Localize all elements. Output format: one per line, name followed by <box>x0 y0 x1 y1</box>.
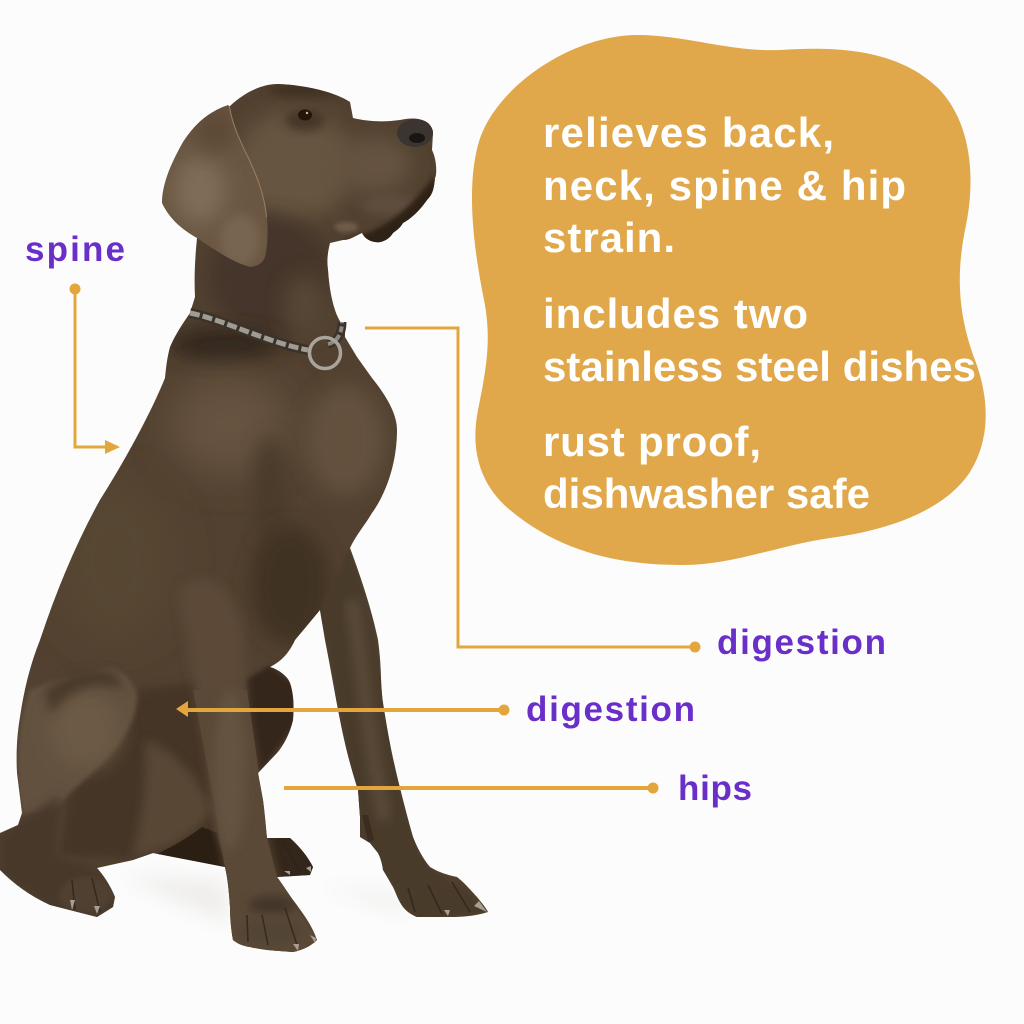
chest and shoulder lights <box>168 375 292 475</box>
label: spine: spine <box>25 230 125 269</box>
connector: neck to digestion <box>365 328 700 652</box>
relieves text block: relieves back, <box>543 109 834 156</box>
rust proof text block: dishwasher safe <box>543 470 870 517</box>
illustration: seated brown dog <box>0 60 500 960</box>
ground shadow <box>120 875 410 925</box>
dishes text block: stainless steel dishes <box>543 343 976 390</box>
far rear paw <box>153 827 226 870</box>
label: digestion lower: digestion <box>526 690 695 729</box>
label: digestion upper: digestion <box>717 623 886 662</box>
dog eye <box>298 110 312 120</box>
relieves text block: strain. <box>543 214 675 261</box>
relieves text block <box>543 109 906 261</box>
far front leg <box>320 548 488 920</box>
dog body silhouette and shading <box>0 60 500 960</box>
dishes text block <box>543 290 976 390</box>
callout blob <box>472 35 986 565</box>
hock and rear paw <box>0 795 120 920</box>
far thigh <box>245 665 295 780</box>
dog ear <box>162 105 268 267</box>
rust proof text block: rust proof, <box>543 418 761 465</box>
rust proof text block <box>543 418 870 517</box>
callout text <box>543 109 976 517</box>
neck shading <box>208 215 332 335</box>
connector: hips <box>284 782 658 794</box>
label: hips: hips <box>678 769 752 808</box>
shoulder shadow under collar <box>170 327 280 363</box>
head shading <box>235 82 435 250</box>
arrow: spine <box>70 284 120 454</box>
dog nose <box>397 119 433 147</box>
near thigh <box>18 668 137 815</box>
dishes text block: includes two <box>543 290 808 337</box>
collar chain <box>190 313 342 368</box>
belly and flank <box>60 680 225 860</box>
near front leg <box>178 579 317 955</box>
paw toes and claws <box>70 842 487 951</box>
relieves text block: neck, spine & hip <box>543 162 906 209</box>
arrow: digestion lower <box>176 701 510 717</box>
paw shading <box>248 896 296 914</box>
